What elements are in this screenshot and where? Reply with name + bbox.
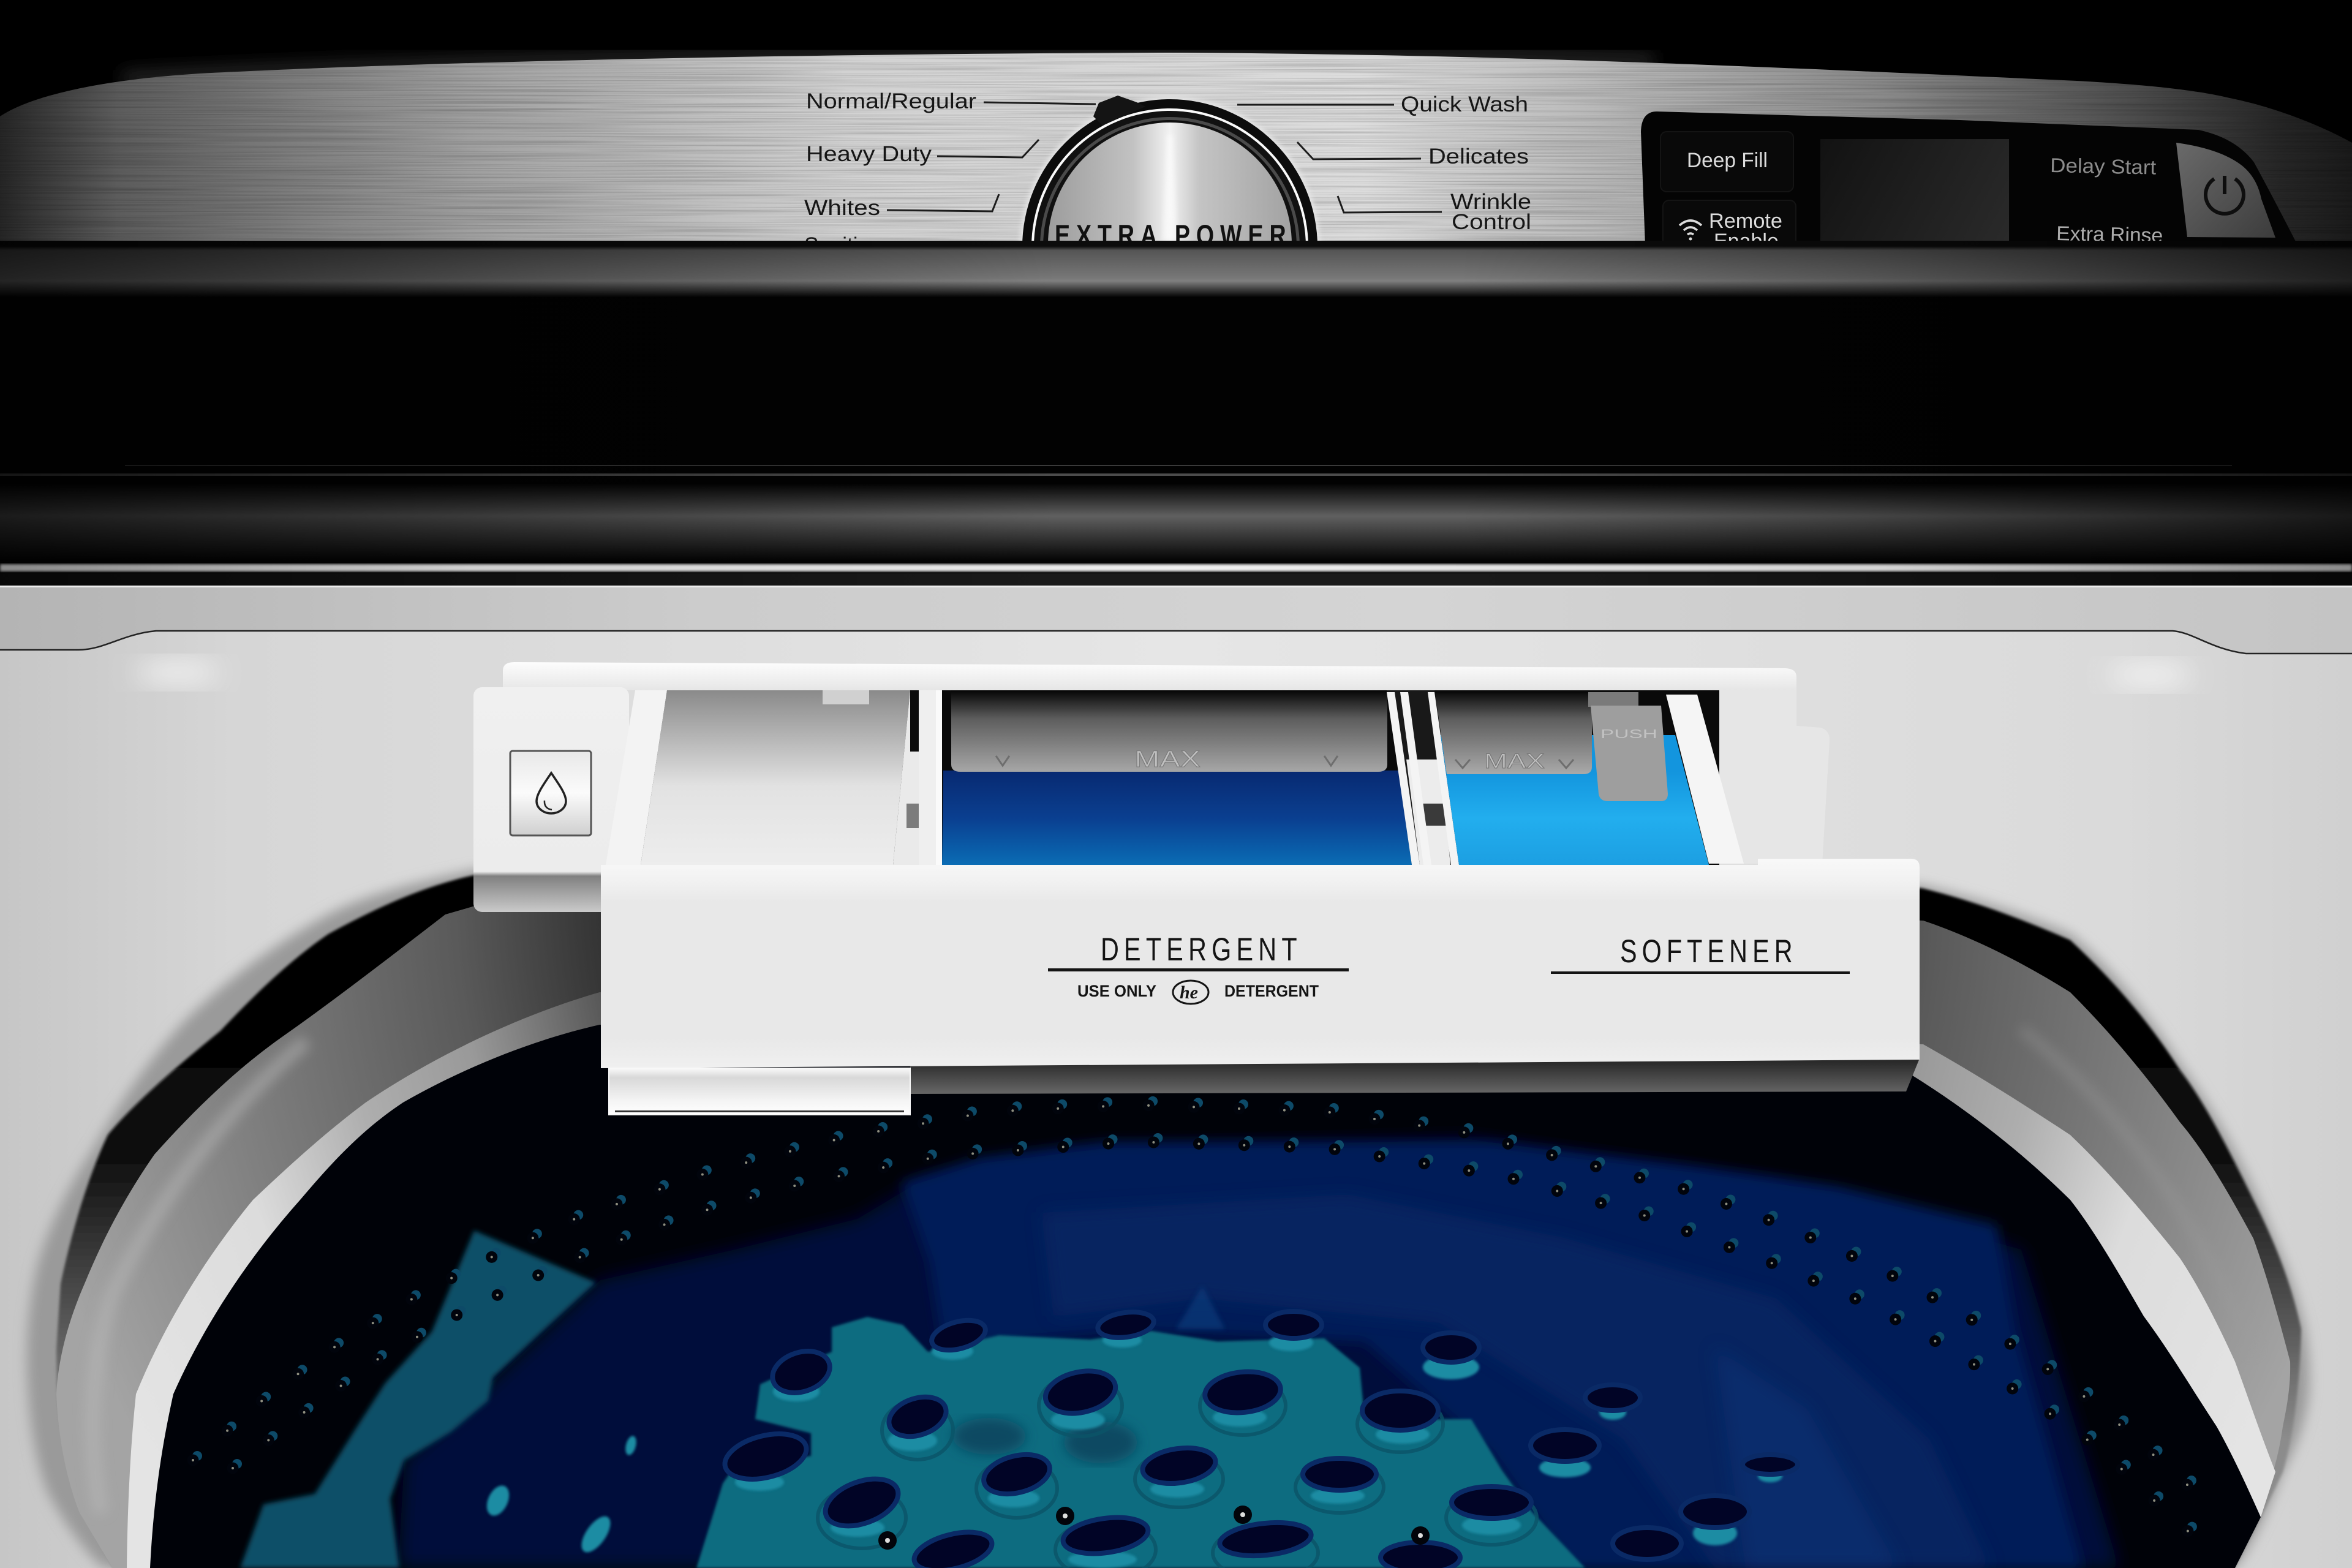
labels: Delay Start, Extra Rinse: Delay Start [2050,154,2157,179]
label: detergent: DETERGENT [1224,982,1319,1000]
softener push tab: PUSH [1600,728,1657,741]
dim teal cloth left [240,1231,596,1568]
drum perforation rows [193,1101,2214,1544]
button: water drop [510,751,591,835]
cycle labels with leader lines: Wrinkle [1450,190,1531,214]
lid: MAX marking: MAX [1134,747,1200,772]
softener push tab [1588,692,1668,801]
clear pull tab [609,1068,910,1115]
cycle labels with leader lines: Heavy Duty [806,142,932,166]
drum balance balls [878,1506,1430,1550]
dial: cycle selector knob [1020,96,1320,397]
agitator holes [720,1309,1798,1568]
labels: Delay Start, Extra Rinse [2050,154,2163,247]
tub ring [56,870,2290,1568]
label: detergent: DETERGENT [1101,932,1297,968]
icon: HE logo: he [1180,982,1198,1003]
screen [1820,139,2009,243]
cycle labels with leader lines [804,89,1531,257]
label: detergent [1048,932,1349,1004]
compartment: softener, light blue liquid [1435,692,1744,865]
lid: MAX marking: MAX [1484,750,1545,773]
cycle labels with leader lines: Whites [804,196,880,220]
tub opening shadow [27,869,2309,1568]
panel: brushed metal fascia [0,49,2352,245]
navy cloth [398,1139,2119,1568]
control display panel [1641,111,2297,255]
cycle labels with leader lines: Delicates [1428,145,1529,168]
drum water and clothes [123,992,2291,1568]
agitator hole halos [818,1375,1537,1568]
button housing [473,687,629,912]
black glass panel [1641,111,2297,245]
drawer interior back [635,690,1719,865]
icon: HE logo [1173,981,1208,1004]
lid edge shading [0,241,2352,586]
label: softener [1551,933,1850,974]
label: detergent: USE ONLY [1077,982,1156,1000]
label: softener: SOFTENER [1620,933,1793,970]
teal cloth shadows [952,1418,1137,1463]
white washer body [0,586,2352,1568]
tub ring light lip [127,992,2275,1568]
blue cloth [902,1142,2082,1568]
lid chrome handle [0,484,2352,586]
lid top strip [0,241,2352,297]
button: Remote Enable: Remote [1709,209,1782,233]
teal cloth [696,1317,1585,1568]
dispenser frame [503,662,1830,862]
dial: cycle selector knob: EXTRA POWER [1055,219,1286,252]
button: Deep Fill: Deep Fill [1687,149,1768,172]
detergent dispenser [473,662,1920,1115]
cycle labels with leader lines: Sanitize [804,233,881,257]
button: Deep Fill [1660,132,1793,192]
compartment: empty bleach cup [606,690,942,865]
cycle labels with leader lines: Normal/Regular [806,89,976,113]
drawer front [601,859,1920,1068]
lid: MAX marking [951,690,1387,772]
cycle labels with leader lines: Control [1452,210,1531,234]
cycle labels with leader lines: Quick Wash [1401,92,1528,116]
glow above control panel [123,53,1654,78]
lid bright highlight [0,564,2352,571]
button: Remote Enable: Enable [1714,230,1779,253]
lid: MAX marking [1435,693,1592,774]
control panel [0,49,2352,245]
compartment: detergent, dark blue liquid [942,690,1417,865]
button: Remote Enable [1663,200,1796,255]
strip beneath drawer [910,1058,1920,1094]
tub gap [56,875,2301,1568]
agitator hole highlights [483,1333,1782,1568]
labels: Delay Start, Extra Rinse: Extra Rinse [2056,222,2163,247]
icon: power button [2176,143,2275,238]
divider between compartments [1387,690,1459,865]
lid window [0,297,2352,484]
